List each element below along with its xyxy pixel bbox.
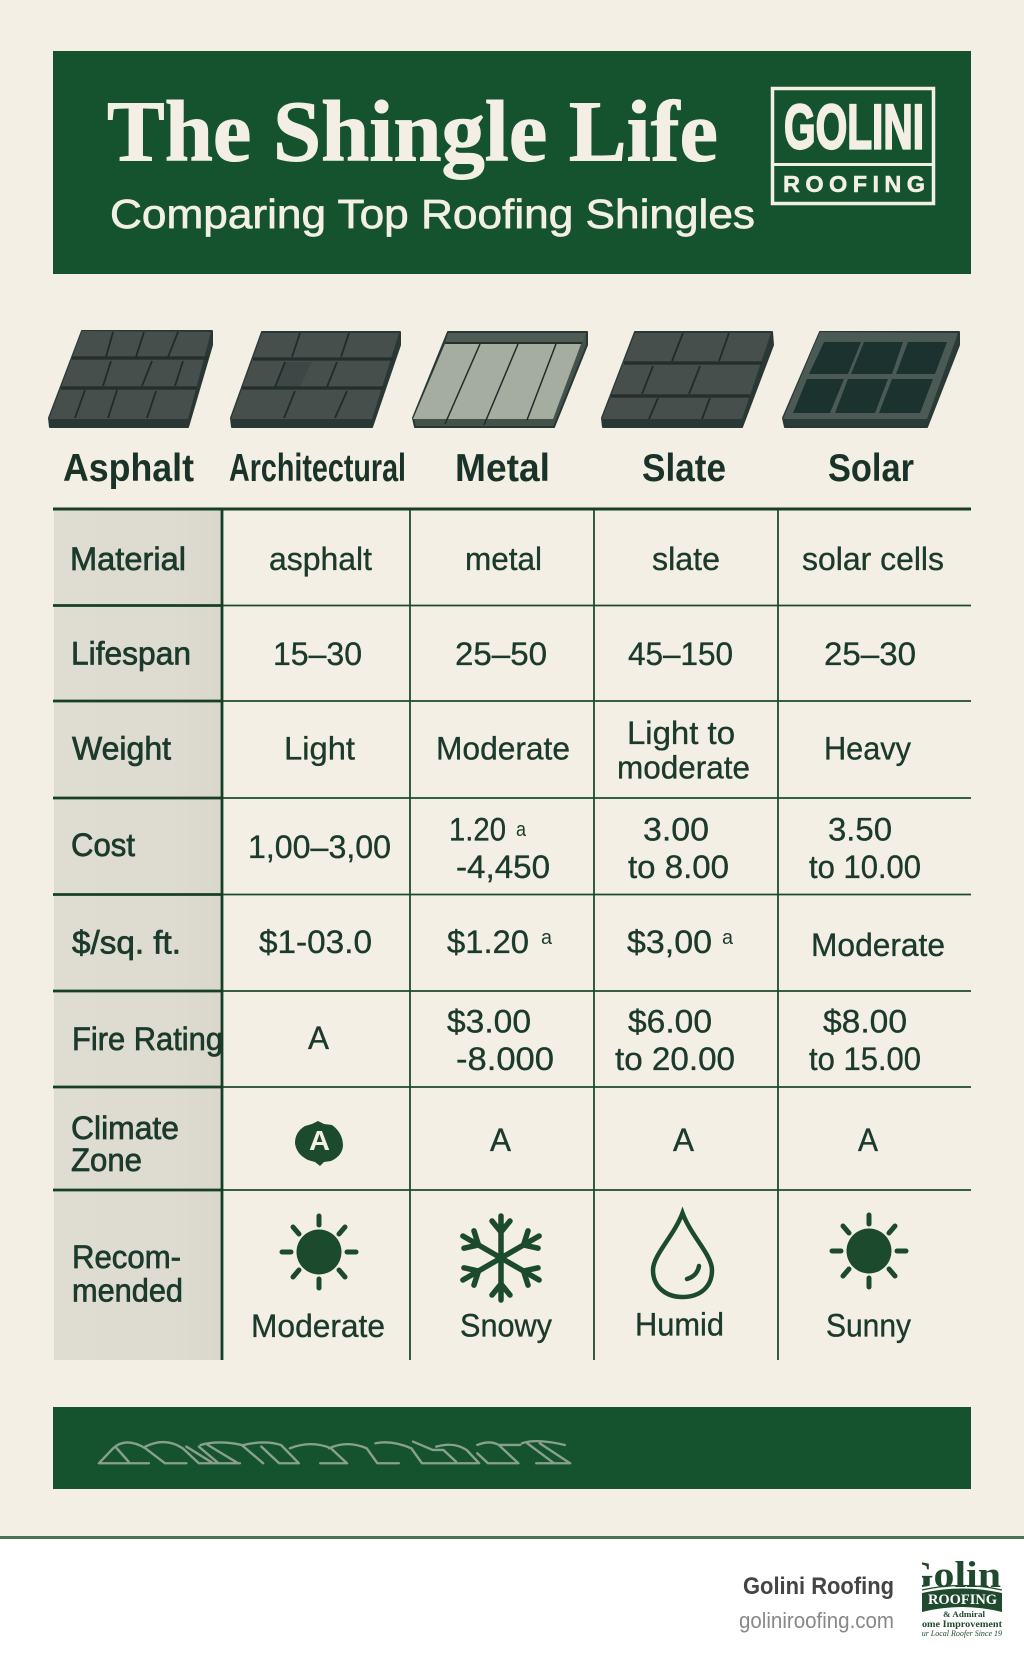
shingle type headings: Slate <box>642 447 726 490</box>
row: cost <box>71 812 921 885</box>
row: recommended: Moderate <box>251 1308 385 1344</box>
footer <box>0 1536 1024 1666</box>
row: lifespan: 45–150 <box>628 636 733 672</box>
row: weight: moderate <box>617 750 750 786</box>
row: price per square foot: $/sq. ft. <box>72 924 181 960</box>
row: price per square foot: $1.20 <box>447 924 529 960</box>
left label column background <box>54 510 221 1360</box>
header banner <box>53 51 971 274</box>
row: fire rating: to 20.00 <box>615 1041 735 1077</box>
row: fire rating: -8.000 <box>456 1041 554 1077</box>
shingle illustration: asphalt <box>49 331 212 427</box>
row: material <box>70 541 944 577</box>
icon: sun moderate <box>282 1216 356 1288</box>
logo: Golini Roofing <box>772 88 934 204</box>
row: material: slate <box>652 541 720 577</box>
row: climate zone: A <box>673 1122 695 1158</box>
shingle illustration: metal <box>413 332 587 427</box>
row: recommended: Recom- <box>72 1239 181 1275</box>
logo: Golini Roofing: GOLINI <box>784 92 924 162</box>
table grid <box>53 508 971 1360</box>
subtitle: Comparing Top Roofing Shingles <box>110 191 755 237</box>
row: lifespan: 25–50 <box>455 636 547 672</box>
shingle type headings: Metal <box>455 447 550 490</box>
row: lifespan: Lifespan <box>71 636 191 672</box>
row: cost: 1,00–3,00 <box>248 829 391 865</box>
shingle type headings: Asphalt <box>63 447 194 490</box>
footer logo: ROOFING <box>928 1592 997 1608</box>
row: cost: to 8.00 <box>628 849 729 885</box>
row: cost: 3.00 <box>643 812 709 848</box>
footer logo <box>922 1561 1002 1638</box>
row: cost: 3.50 <box>828 812 892 848</box>
row: recommended: Sunny <box>826 1308 911 1344</box>
shingle illustration: slate <box>602 332 773 427</box>
row: cost: to 10.00 <box>809 849 921 885</box>
badge: A rating blob: A <box>309 1125 330 1156</box>
row: price per square foot: a <box>541 927 553 949</box>
title: The Shingle Life <box>107 82 718 180</box>
row: lifespan <box>71 636 916 672</box>
row: fire rating <box>72 1004 921 1077</box>
row: recommended: mended <box>72 1272 183 1308</box>
row: weight: Heavy <box>824 730 911 766</box>
shingle type headings <box>63 447 914 490</box>
footer website: goliniroofing.com <box>739 1608 894 1633</box>
comparison table <box>53 508 971 1360</box>
row: lifespan: 25–30 <box>824 636 916 672</box>
row: climate zone <box>71 1110 879 1178</box>
row: fire rating: A <box>308 1020 330 1056</box>
row: price per square foot <box>72 924 945 963</box>
row: price per square foot: $1-03.0 <box>259 924 372 960</box>
shingle illustration: architectural <box>231 332 400 427</box>
row: material: solar cells <box>802 541 944 577</box>
row: fire rating: $8.00 <box>823 1004 907 1040</box>
row: material: Material <box>70 541 186 577</box>
row: climate zone: A <box>858 1122 879 1158</box>
row: climate zone: Climate <box>71 1110 179 1146</box>
row: price per square foot: a <box>722 927 734 949</box>
row: fire rating: to 15.00 <box>809 1041 921 1077</box>
logo: Golini Roofing: ROOFING <box>783 171 925 197</box>
bottom green banner <box>53 1407 971 1489</box>
badge: A rating blob <box>295 1121 343 1166</box>
row: price per square foot: Moderate <box>811 927 945 963</box>
footer logo: Home Improvement <box>914 1620 1003 1630</box>
row: weight: Light <box>284 730 355 766</box>
row: lifespan: 15–30 <box>273 636 362 672</box>
row: weight <box>72 715 911 786</box>
shingle type headings: Solar <box>828 447 914 490</box>
row: price per square foot: $3,00 <box>627 924 712 960</box>
row: cost: Cost <box>71 827 135 863</box>
shingle illustration: solar <box>783 332 959 427</box>
row: climate zone: A <box>490 1122 512 1158</box>
row: recommended <box>72 1213 911 1344</box>
shingle type headings: Architectural <box>229 447 406 490</box>
icon: sun sunny <box>832 1215 906 1287</box>
row: fire rating: Fire Rating <box>72 1021 223 1057</box>
row: recommended: Snowy <box>460 1308 552 1344</box>
row: material: metal <box>465 541 542 577</box>
footer logo: Golin <box>901 1555 1001 1596</box>
row: climate zone: Zone <box>71 1142 142 1178</box>
row: material: asphalt <box>269 541 372 577</box>
footer logo: & Admiral <box>943 1609 986 1619</box>
row: cost: -4,450 <box>456 849 550 885</box>
icon: snowflake <box>458 1216 544 1300</box>
row: cost: 1.20 <box>449 812 506 848</box>
row: recommended: Humid <box>635 1306 724 1342</box>
row: weight: Moderate <box>436 730 570 766</box>
row: fire rating: $3.00 <box>447 1004 531 1040</box>
row: fire rating: $6.00 <box>628 1004 712 1040</box>
row: weight: Light to <box>627 715 735 751</box>
icon: water drop <box>653 1213 712 1297</box>
row: weight: Weight <box>72 730 171 766</box>
footer brand name: Golini Roofing <box>743 1573 894 1600</box>
footer logo: Your Local Roofer Since 1985 <box>914 1628 1010 1638</box>
row: cost: a <box>516 819 527 841</box>
roofline sketch <box>99 1441 570 1463</box>
